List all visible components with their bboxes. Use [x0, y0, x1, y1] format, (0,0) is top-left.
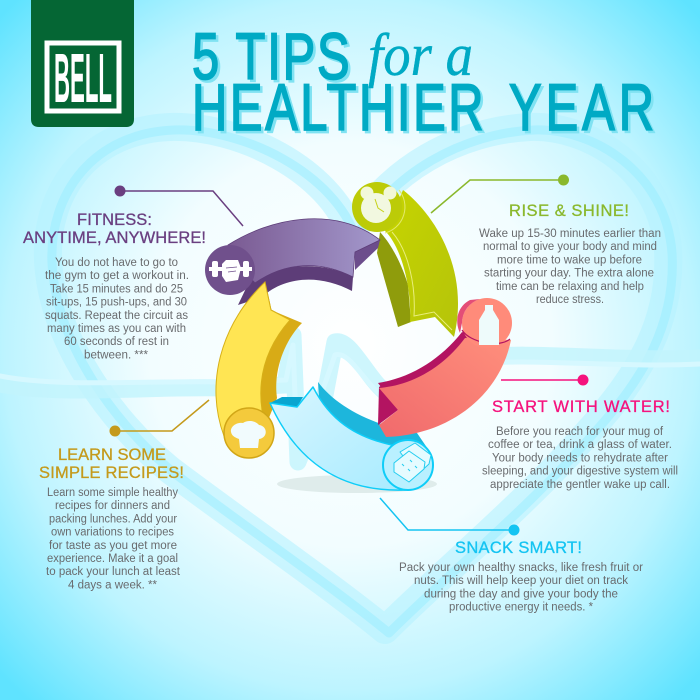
- heading: fitness: ANYTIME, ANYWHERE!: [23, 229, 206, 247]
- text: fitness body: You do not have to go to: [55, 257, 178, 269]
- title: [192, 20, 657, 147]
- text: snack smart body: nuts. This will help keep your diet on track: [414, 575, 628, 587]
- text: recipes body: recipes for dinners and: [55, 500, 170, 512]
- text: recipes body: packing lunches. Add your: [49, 513, 177, 525]
- text: fitness body: sit-ups, 15 push-ups, and 30: [46, 297, 187, 309]
- text: rise and shine body: Wake up 15-30 minutes earlier than: [479, 228, 661, 240]
- text: recipes body: experience. Make it a goal: [47, 553, 178, 565]
- text: recipes body: [46, 487, 181, 591]
- text: fitness body: between. ***: [84, 349, 149, 361]
- text: fitness body: squats. Repeat the circuit as: [45, 310, 188, 322]
- text: rise and shine body: more time to wake up before: [497, 254, 642, 266]
- text: fitness body: many times as you can with: [47, 323, 186, 335]
- text: snack smart body: productive energy it needs. *: [449, 602, 594, 614]
- heading: snack smart: SNACK SMART!: [455, 539, 582, 557]
- icon: toast: [394, 443, 431, 482]
- panel: rise and shine: [479, 202, 661, 306]
- heading: fitness: FITNESS:: [77, 211, 152, 229]
- title: HEALTHIER: [192, 71, 484, 145]
- text: start with water body: appreciate the gentler wake up call.: [490, 479, 670, 491]
- text: fitness body: 60 seconds of rest in: [64, 336, 169, 348]
- panel: fitness: [23, 211, 206, 361]
- icon: chef hat: [231, 421, 266, 448]
- text: start with water body: Your body needs to rehydrate after: [492, 452, 668, 464]
- segment: green rise and shine: [352, 182, 458, 337]
- panel: snack smart: [399, 539, 643, 614]
- panel: start with water: [482, 398, 678, 491]
- heading: fitness: [23, 211, 206, 247]
- connector: start with water: [501, 374, 588, 386]
- text: snack smart body: Pack your own healthy snacks, like fresh fruit or: [399, 562, 643, 574]
- ground shadow: [277, 475, 437, 493]
- text: recipes body: 4 days a week. **: [68, 579, 158, 591]
- text: fitness body: the gym to get a workout in.: [45, 270, 189, 282]
- text: BELL: [54, 39, 112, 117]
- title: 5 TIPS: [194, 22, 352, 96]
- title: HEALTHIER: [194, 73, 486, 147]
- text: rise and shine body: [479, 228, 661, 306]
- connector: fitness: [114, 186, 243, 226]
- text: start with water body: Before you reach for your mug of: [496, 426, 664, 438]
- text: recipes body: own variations to recipes: [51, 527, 174, 539]
- connector: rise and shine: [431, 174, 569, 213]
- heading: recipes: SIMPLE RECIPES!: [39, 464, 184, 482]
- text: rise and shine body: normal to give your body and mind: [483, 241, 657, 253]
- icon: alarm clock: [360, 186, 396, 223]
- heading: recipes: [39, 446, 184, 482]
- text: rise and shine body: reduce stress.: [536, 294, 604, 306]
- segment: blue snack: [270, 382, 433, 490]
- segment: yellow recipes: [216, 282, 302, 458]
- title: YEAR: [509, 71, 654, 145]
- text: fitness body: [45, 257, 189, 361]
- connector: recipes: [110, 400, 209, 436]
- text: fitness body: Take 15 minutes and do 25: [50, 283, 183, 295]
- title: for a: [368, 22, 473, 88]
- icon: dumbbell and fist: [209, 260, 252, 282]
- segment: purple fitness: [205, 219, 380, 305]
- text: start with water body: [482, 426, 678, 491]
- heading: rise and shine: RISE & SHINE!: [509, 202, 629, 220]
- title: YEAR: [512, 73, 657, 147]
- title: 5 TIPS: [192, 20, 350, 94]
- text: recipes body: Learn some simple healthy: [47, 487, 178, 499]
- text: rise and shine body: time can be relaxing and help: [496, 281, 644, 293]
- heading: start with water: START WITH WATER!: [492, 398, 670, 416]
- heart outline with heartbeat line: [0, 127, 700, 633]
- panel: learn some simple recipes: [39, 446, 184, 591]
- text: recipes body: for taste as you get more: [49, 540, 177, 552]
- connector: snack smart: [380, 498, 520, 536]
- heading: recipes: LEARN SOME: [58, 446, 166, 464]
- logo: [31, 0, 134, 127]
- text: snack smart body: [399, 562, 643, 614]
- text: recipes body: to pack your lunch at least: [46, 566, 181, 578]
- text: start with water body: coffee or tea, drink a glass of water.: [488, 439, 672, 451]
- segment: red water: [378, 298, 512, 437]
- text: rise and shine body: starting your day. The extra alone: [484, 268, 654, 280]
- text: snack smart body: during the day and give your body the: [424, 588, 618, 600]
- segment: yellow arrow tip overlap: [239, 281, 276, 312]
- text: start with water body: sleeping, and your digestive system will: [482, 466, 678, 478]
- icon: water bottle: [479, 305, 499, 345]
